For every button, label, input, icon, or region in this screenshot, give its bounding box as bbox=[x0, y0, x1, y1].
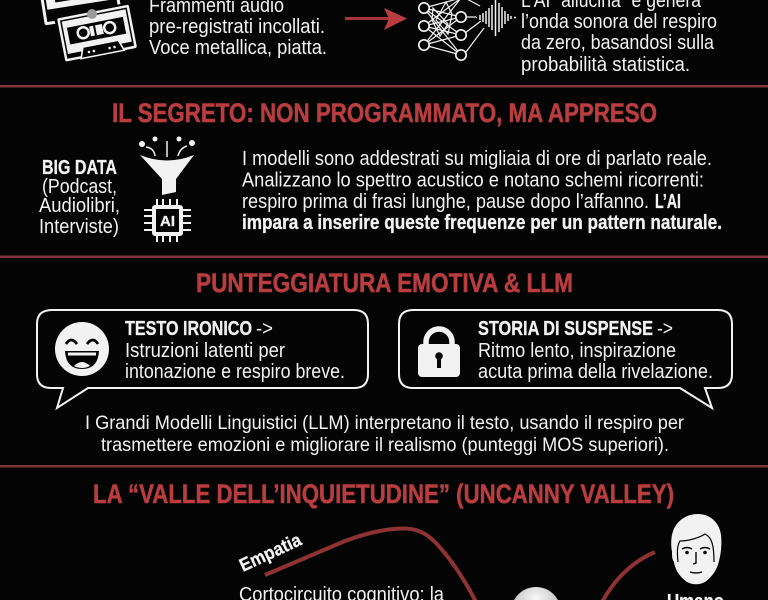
text: big data sources: BIG DATA bbox=[42, 157, 117, 179]
panel: ironic text bubble bbox=[37, 310, 368, 408]
text: AI synthesis: probabilità statistica. bbox=[521, 54, 690, 76]
curve bbox=[265, 528, 655, 600]
panel: traditional vs AI voice bbox=[37, 0, 717, 76]
arrow: from old to new bbox=[345, 8, 407, 30]
text: LLM paragraph: I Grandi Modelli Linguistici (LLM) interpretano il testo, usando il respiro per bbox=[85, 412, 684, 434]
text: training explanation: L’AI bbox=[655, 191, 681, 213]
icon: laughing face bbox=[55, 322, 109, 376]
text: ironic text description: TESTO IRONICO bbox=[125, 318, 252, 340]
speech bubble outline bbox=[37, 310, 368, 408]
icon: sound waveform bbox=[476, 0, 516, 36]
speech bubble outline bbox=[399, 310, 732, 408]
icon: AI chip bbox=[144, 199, 191, 242]
text: traditional synthesis: pre-registrati incollati. bbox=[149, 16, 325, 38]
text: suspense story description: STORIA DI SUSPENSE bbox=[478, 318, 653, 340]
panel: big data training bbox=[39, 136, 722, 242]
icon: cassette tapes bbox=[37, 0, 137, 63]
text: big data sources bbox=[39, 157, 120, 238]
text: ironic text description bbox=[125, 318, 345, 383]
text: ironic text description: Istruzioni latenti per bbox=[125, 340, 285, 362]
text: suspense story description: acuta prima della rivelazione. bbox=[478, 361, 713, 383]
text: suspense story description bbox=[478, 318, 713, 383]
icon: AI chip: AI bbox=[160, 213, 175, 230]
heading: uncanny valley: LA “VALLE DELL’INQUIETUDINE” (UNCANNY VALLEY) bbox=[93, 479, 674, 509]
text: AI synthesis: da zero, basandosi sulla bbox=[521, 32, 715, 54]
icon: padlock bbox=[418, 329, 460, 377]
text: big data sources: Audiolibri, bbox=[39, 195, 120, 217]
text: suspense story description: -> bbox=[657, 318, 673, 340]
heading: il segreto: IL SEGRETO: NON PROGRAMMATO, MA APPRESO bbox=[112, 98, 657, 128]
icon: human face bbox=[671, 514, 721, 584]
text: training explanation: I modelli sono addestrati su migliaia di ore di parlato reale. bbox=[242, 148, 712, 170]
text: suspense story description: Ritmo lento, inspirazione bbox=[478, 340, 676, 362]
icon: funnel bbox=[139, 136, 195, 195]
text: LLM paragraph: trasmettere emozioni e migliorare il realismo (punteggi MOS superiori). bbox=[101, 434, 669, 456]
text: AI synthesis: l’onda sonora del respiro bbox=[521, 11, 717, 33]
heading: punteggiatura emotiva: PUNTEGGIATURA EMOTIVA & LLM bbox=[196, 268, 573, 298]
text: ironic text description: intonazione e respiro breve. bbox=[125, 361, 345, 383]
chart: uncanny valley curve bbox=[236, 514, 724, 600]
text: traditional synthesis: Voce metallica, piatta. bbox=[149, 37, 327, 59]
text: training explanation bbox=[242, 148, 722, 234]
panel: suspense story bubble bbox=[399, 310, 732, 408]
text: big data sources: (Podcast, bbox=[42, 176, 117, 198]
text: training explanation: respiro prima di frasi lunghe, pause dopo l’affanno. bbox=[242, 191, 649, 213]
text: AI synthesis bbox=[521, 0, 717, 76]
text: traditional synthesis bbox=[149, 0, 327, 59]
text: ironic text description: -> bbox=[256, 318, 273, 340]
axis label: empathy: Empatia bbox=[236, 528, 305, 576]
icon: neural network bbox=[419, 0, 484, 60]
text: LLM paragraph bbox=[85, 412, 684, 456]
icon: robot head bbox=[511, 587, 561, 600]
text: training explanation: Analizzano lo spettro acustico e notano schemi ricorrenti: bbox=[242, 170, 704, 192]
text: big data sources: Interviste) bbox=[39, 216, 119, 238]
